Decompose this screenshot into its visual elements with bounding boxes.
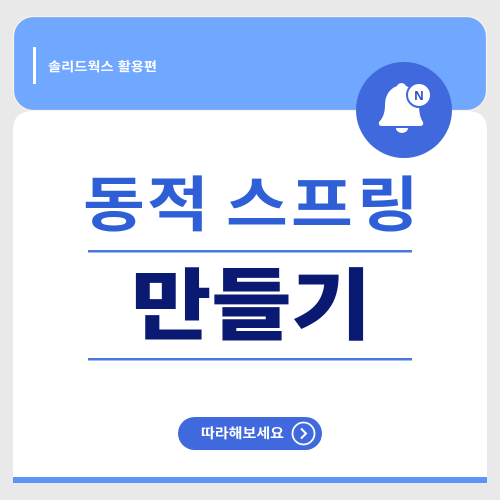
header label: 솔리드웍스 활용편 <box>48 59 157 74</box>
icon: notification bell badge <box>356 62 452 158</box>
button: follow along: 따라해보세요 <box>201 426 284 441</box>
bottom blue strip <box>13 477 487 483</box>
accent bar in header <box>33 47 36 84</box>
title line 1: 동적 스프링 <box>83 172 419 239</box>
icon: notification bell badge: N <box>414 88 424 103</box>
panel: white card <box>13 111 487 480</box>
button: follow along <box>178 417 322 450</box>
divider top <box>88 250 412 252</box>
divider bottom <box>88 358 412 360</box>
panel: blue header <box>14 16 486 110</box>
title line 2: 만들기 <box>131 262 372 350</box>
